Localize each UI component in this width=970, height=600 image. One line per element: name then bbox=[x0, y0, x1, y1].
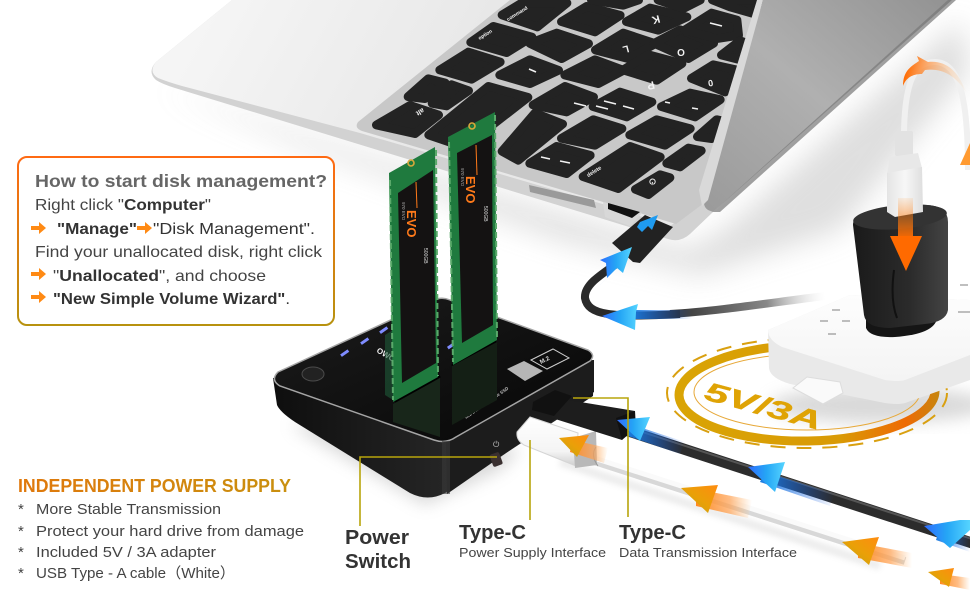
pcb bbox=[389, 147, 438, 402]
label: power switch: Power bbox=[345, 527, 409, 549]
connector neck bbox=[887, 153, 922, 174]
grey ring bbox=[573, 431, 597, 468]
cable bbox=[616, 427, 970, 544]
list: Included 5V / 3A adapter bbox=[36, 544, 216, 561]
list: USB Type - A cable（White） bbox=[36, 565, 235, 582]
laptop lid bbox=[704, 0, 952, 212]
dock right side bbox=[446, 360, 594, 494]
speed badge bbox=[507, 361, 543, 381]
lid lower bevel bbox=[713, 0, 956, 212]
arrow shaft bbox=[898, 198, 913, 240]
badge label: 5V/3A bbox=[701, 376, 825, 436]
leader line: power supply bbox=[529, 440, 531, 520]
black data cable bbox=[532, 390, 970, 544]
dock top face bbox=[274, 298, 593, 441]
socket slots bbox=[820, 285, 970, 334]
orange flow arrows bbox=[559, 435, 970, 590]
white USB cable bbox=[887, 62, 968, 217]
arrow bbox=[31, 222, 46, 234]
label: power switch bbox=[345, 527, 411, 573]
laptop base bbox=[152, 0, 800, 240]
lid edge bbox=[699, 0, 763, 206]
M.2 badge bbox=[531, 349, 569, 369]
badge text: M.2 bbox=[539, 356, 551, 366]
SSD slot lines bbox=[395, 341, 496, 402]
line 1: Right click " Computer " bbox=[35, 197, 211, 214]
dashed outer ring bbox=[667, 338, 947, 448]
charger adapter bbox=[852, 201, 948, 337]
front edge seam bbox=[442, 441, 450, 494]
SSD reflections bbox=[393, 378, 440, 437]
power button bbox=[302, 367, 324, 381]
printed dock note: M.2 Dual Bay NVMe SSD bbox=[464, 385, 510, 420]
SD card slot bbox=[529, 185, 596, 208]
list bbox=[18, 501, 304, 582]
key legends: P bbox=[646, 78, 656, 92]
SSD left bbox=[389, 147, 438, 402]
gold notch bbox=[408, 160, 414, 166]
key legends: K bbox=[650, 12, 661, 26]
arrow 4 bbox=[928, 568, 970, 590]
palm rest bbox=[152, 0, 790, 226]
docking station bbox=[273, 298, 594, 505]
panel heading: How to start disk management? bbox=[35, 171, 327, 191]
leader line: power switch bbox=[360, 457, 497, 526]
list: More Stable Transmission bbox=[36, 501, 221, 518]
capacity: 500GB bbox=[482, 206, 488, 222]
orange arrows on charger bbox=[890, 56, 970, 271]
heading: INDEPENDENT POWER SUPPLY bbox=[18, 476, 291, 496]
laptop bbox=[152, 0, 970, 275]
dock body bbox=[273, 360, 594, 498]
pcb bbox=[448, 112, 497, 365]
arrow 1 bbox=[617, 417, 685, 454]
cable highlight bbox=[630, 428, 970, 540]
list: * bbox=[18, 523, 24, 540]
leader line: data transmission bbox=[573, 398, 628, 517]
power strip shadow bbox=[770, 387, 970, 423]
adapter top bbox=[852, 201, 948, 233]
black label bbox=[457, 135, 493, 343]
port face bbox=[532, 390, 572, 416]
strip tab bbox=[793, 377, 843, 404]
adapter base bbox=[866, 300, 937, 337]
arrow 2 bbox=[681, 485, 752, 518]
gold notch bbox=[469, 123, 475, 129]
power icon: ⏻ bbox=[493, 440, 500, 449]
SSD right bbox=[448, 112, 497, 365]
usb-c connector bbox=[612, 215, 673, 263]
white plug bbox=[517, 417, 578, 466]
key legends: command bbox=[506, 5, 529, 23]
EVO: EVO bbox=[404, 210, 419, 237]
key legends: ⏻ bbox=[648, 176, 656, 186]
adapter body bbox=[853, 205, 948, 328]
plug collar bbox=[616, 411, 636, 440]
key legends: option bbox=[477, 29, 494, 42]
blue flow arrows bbox=[617, 417, 970, 552]
arrow bbox=[31, 291, 46, 303]
dock shadow bbox=[290, 420, 520, 505]
cable highlight bbox=[560, 447, 905, 558]
usb port opening bbox=[608, 203, 640, 218]
small blue arrow bbox=[637, 215, 658, 232]
down arrow bbox=[890, 198, 922, 271]
orange stripe bbox=[476, 145, 477, 175]
label: type-c power: Power Supply Interface bbox=[459, 545, 606, 560]
arrow head bbox=[890, 236, 922, 271]
label: type-c data: Type-C bbox=[619, 522, 686, 544]
label: type-c data bbox=[619, 522, 797, 560]
laptop shadow bbox=[160, 20, 970, 275]
panel frame bbox=[18, 157, 334, 325]
arrow 2 bbox=[748, 462, 835, 506]
blue arrow left bbox=[602, 304, 692, 330]
list: Protect your hard drive from damage bbox=[36, 523, 304, 540]
line 2: "Manage" bbox=[57, 221, 137, 238]
black plug bbox=[552, 398, 635, 440]
pcb bright edge bbox=[449, 115, 497, 362]
badge frame bbox=[531, 349, 569, 369]
arrow 3 bbox=[924, 520, 970, 552]
strip body bbox=[768, 295, 970, 404]
blue arrow up bbox=[600, 247, 632, 285]
label: type-c data: Data Transmission Interface bbox=[619, 545, 797, 560]
arc arrow bbox=[903, 56, 966, 92]
label: type-c power bbox=[459, 522, 606, 560]
key legends: L bbox=[621, 42, 630, 55]
EVO: EVO bbox=[463, 176, 478, 203]
right up arrow bbox=[960, 143, 970, 165]
arrow 1 bbox=[559, 435, 608, 463]
keyboard keys bbox=[376, 0, 761, 195]
list: * bbox=[18, 565, 24, 582]
adapter shine bbox=[893, 270, 897, 318]
strip top bbox=[768, 295, 970, 381]
line 4: "Unallocated ", and choose bbox=[53, 268, 266, 285]
cable far end bbox=[670, 296, 825, 314]
line 3: Find your unallocated disk, right click bbox=[35, 244, 323, 261]
arrow bbox=[137, 222, 152, 234]
usb cord bbox=[904, 62, 968, 170]
plug ridge bbox=[593, 447, 598, 466]
key legends: O bbox=[677, 46, 685, 57]
thick ring bbox=[678, 343, 936, 443]
model: 970 EVO bbox=[401, 202, 406, 221]
status LEDs bbox=[340, 326, 454, 357]
black label bbox=[398, 170, 436, 383]
model: 970 EVO bbox=[460, 168, 465, 187]
cable shadow bbox=[560, 462, 880, 566]
black cable to laptop bbox=[585, 215, 825, 330]
power switch bbox=[489, 452, 503, 467]
key legends bbox=[414, 5, 714, 186]
list: * bbox=[18, 544, 24, 561]
panel: disk management bbox=[18, 157, 334, 325]
white power cable bbox=[517, 417, 905, 566]
usb plug bbox=[887, 167, 923, 217]
orange stripe bbox=[416, 182, 417, 208]
power strip bbox=[768, 285, 970, 404]
cable edge bbox=[560, 450, 905, 561]
key legends: delete bbox=[586, 165, 603, 179]
pcb bright edge bbox=[390, 150, 438, 400]
key legends: alt bbox=[414, 106, 425, 117]
key marks bbox=[529, 23, 722, 163]
arrow bbox=[31, 268, 46, 280]
label: type-c power: Type-C bbox=[459, 522, 526, 544]
5V/3A badge bbox=[667, 338, 947, 448]
line 5: "New Simple Volume Wizard" . bbox=[53, 291, 290, 308]
reflected logo: OWC bbox=[375, 346, 397, 364]
line 2: "Disk Management". bbox=[153, 221, 315, 238]
cable bend dark bbox=[585, 260, 680, 316]
usb port bbox=[603, 202, 642, 226]
thin inner ring bbox=[694, 354, 920, 430]
line 2 bbox=[31, 221, 315, 238]
label: power switch: Switch bbox=[345, 551, 411, 573]
panel: independent power supply bbox=[18, 476, 304, 582]
capacity: 500GB bbox=[422, 248, 428, 264]
strain relief bbox=[895, 131, 913, 156]
keyboard deck bbox=[357, 0, 770, 224]
arrow head bbox=[602, 304, 638, 330]
arrow tail bbox=[630, 310, 692, 319]
list: * bbox=[18, 501, 24, 518]
key legends: 0 bbox=[707, 78, 714, 88]
arrow 3 bbox=[842, 537, 912, 568]
